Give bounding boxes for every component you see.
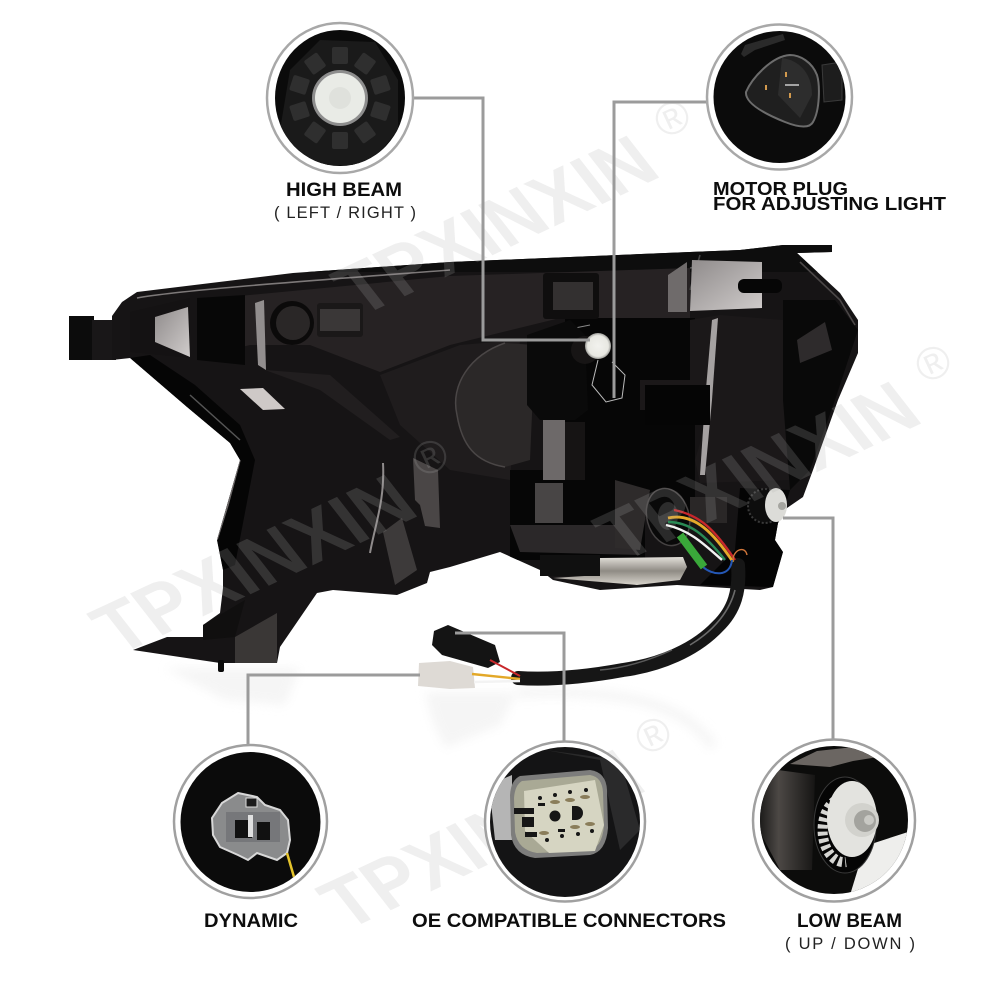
wire grommet [640, 484, 696, 550]
vertical strut [535, 420, 585, 523]
leader line: connectors [455, 633, 564, 741]
grey bracket [413, 458, 440, 528]
wiring cable [518, 510, 747, 679]
label: low beam: LOW BEAM [797, 911, 902, 932]
sticker label [240, 388, 285, 410]
watermark: left: ® [404, 426, 456, 488]
leader line: high beam [414, 98, 590, 340]
housing surface detail [100, 240, 870, 587]
motor plug block [527, 320, 588, 420]
callout: dynamic [170, 745, 335, 905]
watermark: bottom: ® [627, 704, 679, 766]
edge highlights [137, 255, 855, 553]
floor reflection [165, 668, 713, 748]
left mounting tab [69, 316, 116, 360]
window 1 [317, 303, 363, 337]
plug connector [418, 625, 520, 689]
callout: connectors [485, 740, 650, 905]
watermark: bottom: TPXINXIN [304, 735, 660, 945]
watermark: top: ® [646, 87, 698, 149]
low beam adjuster [748, 488, 787, 523]
leader line: dynamic [248, 675, 420, 745]
watermark: right: TPXINXIN [580, 367, 936, 577]
watermark: right: ® [907, 332, 959, 394]
adjuster knob high beam [571, 333, 611, 364]
watermark: left: TPXINXIN [76, 460, 432, 670]
green fuse holder [680, 535, 704, 567]
label: motor plug [713, 179, 946, 214]
label: dynamic: DYNAMIC [204, 911, 298, 932]
pale window right [668, 260, 782, 312]
leader line: motor plug [614, 102, 709, 398]
label: high beam [274, 180, 416, 222]
side reflector [383, 518, 417, 585]
pale panel left [155, 307, 190, 357]
label: low beam: ( UP / DOWN ) [785, 935, 915, 953]
label: high beam: ( LEFT / RIGHT ) [274, 204, 416, 222]
foot bracket [203, 600, 277, 672]
label: low beam [785, 911, 915, 953]
headlight unit [69, 240, 870, 689]
grommet [270, 301, 314, 345]
label: motor plug: MOTOR PLUG [713, 179, 848, 199]
housing body [112, 245, 858, 663]
watermark: top: TPXINXIN [318, 121, 674, 331]
label: high beam: HIGH BEAM [286, 180, 402, 201]
callout: low beam [752, 738, 916, 903]
LED module [540, 555, 687, 585]
leader line: low beam [783, 518, 833, 740]
callout: motor plug [705, 20, 860, 175]
window 2 [543, 273, 599, 319]
callout: high beam [266, 22, 414, 174]
label: connectors: OE COMPATIBLE CONNECTORS [412, 911, 726, 932]
label: motor plug: FOR ADJUSTING LIGHT [713, 194, 946, 214]
